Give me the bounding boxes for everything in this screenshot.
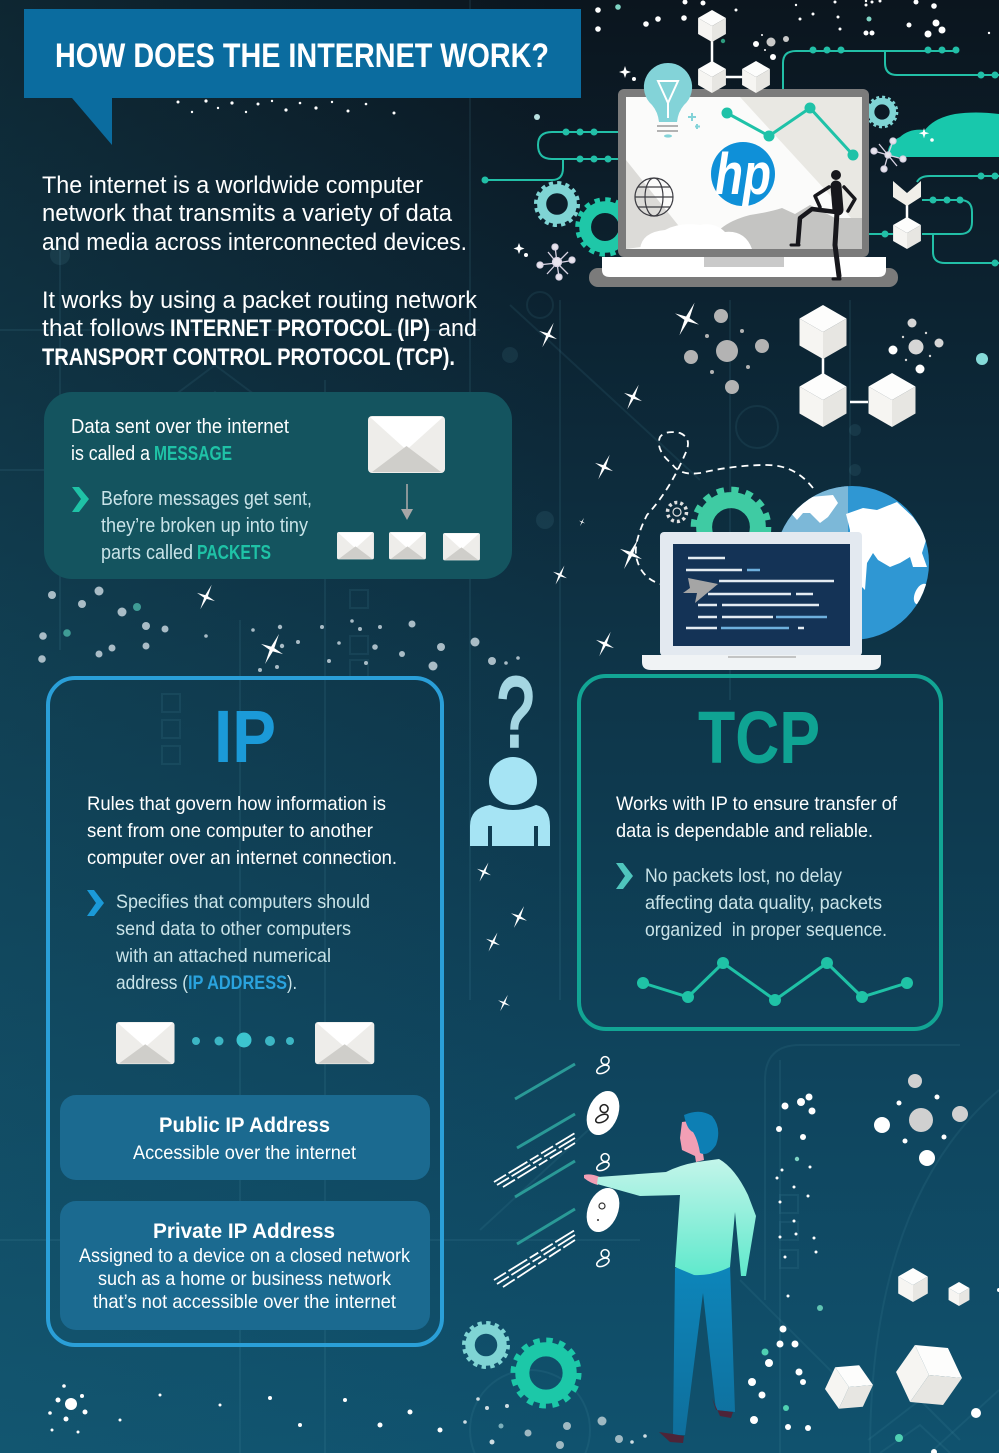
dashed path bbox=[636, 432, 813, 584]
scattered dots top right bbox=[534, 0, 990, 120]
decorative dots under banner bbox=[176, 99, 396, 114]
IP detail text: Specifies that computers should bbox=[116, 891, 370, 913]
intro text: and bbox=[438, 315, 477, 342]
laptop lid bbox=[589, 268, 898, 287]
cubes bbox=[698, 10, 921, 249]
top laptop illustration with circuits bbox=[482, 0, 999, 287]
TCP detail text: organized in proper sequence. bbox=[645, 919, 887, 941]
panel: TCP bbox=[579, 676, 941, 1029]
HP logo: hp bbox=[715, 142, 771, 207]
hand bbox=[584, 1174, 600, 1185]
heading: TCP: TCP bbox=[698, 696, 820, 779]
panel: message and packets bbox=[44, 392, 512, 579]
spark nodes bbox=[537, 138, 906, 280]
intro text: INTERNET PROTOCOL (IP) bbox=[170, 315, 430, 342]
shirt bbox=[597, 1159, 756, 1276]
icon: businessman bbox=[791, 170, 855, 279]
box: public IP address bbox=[60, 1095, 430, 1180]
cubes bottom right bbox=[820, 1268, 971, 1418]
screen artwork bbox=[626, 97, 862, 249]
box: public IP address: Accessible over the internet bbox=[133, 1142, 357, 1164]
icon: person with question mark bbox=[470, 657, 550, 846]
panel: message and packets: PACKETS bbox=[197, 542, 271, 564]
head bbox=[680, 1120, 704, 1162]
TCP detail text: affecting data quality, packets bbox=[645, 892, 882, 914]
box: private IP address: Private IP Address bbox=[153, 1220, 335, 1243]
circuit lines bbox=[482, 46, 999, 266]
second laptop illustration with globe bbox=[613, 432, 931, 670]
cloud bbox=[888, 112, 999, 157]
IP description: computer over an internet connection. bbox=[87, 847, 397, 869]
panel: message and packets: Before messages get sent, bbox=[101, 488, 312, 510]
icon: paper plane bbox=[683, 578, 718, 603]
IP detail text: with an attached numerical bbox=[115, 945, 331, 967]
IP description bbox=[87, 793, 397, 869]
panel: message and packets: parts called bbox=[101, 542, 193, 564]
box: public IP address: Public IP Address bbox=[159, 1114, 330, 1137]
TCP detail text: No packets lost, no delay bbox=[645, 865, 842, 887]
box: private IP address: Assigned to a device on a closed network bbox=[79, 1245, 410, 1267]
box: private IP address: that’s not accessible over the internet bbox=[93, 1291, 397, 1313]
IP detail text: address ( bbox=[116, 972, 188, 994]
globe bbox=[775, 480, 931, 640]
title banner bbox=[24, 9, 581, 145]
panel: message and packets: is called a bbox=[71, 443, 151, 465]
intro text bbox=[42, 172, 478, 371]
panel: IP bbox=[48, 678, 442, 1345]
IP detail text bbox=[115, 891, 370, 994]
laptop body bbox=[660, 532, 862, 656]
sparkle stars bbox=[514, 66, 636, 257]
gears bbox=[536, 183, 578, 225]
bullet chevron bbox=[616, 863, 633, 889]
icon: person with question mark: ? bbox=[497, 657, 534, 767]
intro text: that follows bbox=[42, 315, 165, 342]
icon: green gear bbox=[694, 490, 768, 564]
title banner: HOW DOES THE INTERNET WORK? bbox=[55, 37, 549, 75]
IP description: Rules that govern how information is bbox=[87, 793, 386, 815]
panel: message and packets: Data sent over the internet bbox=[71, 416, 289, 438]
IP detail text: IP ADDRESS bbox=[188, 972, 287, 994]
intro text: It works by using a packet routing network bbox=[42, 287, 478, 314]
intro text: network that transmits a variety of data bbox=[42, 200, 453, 227]
box: private IP address: such as a home or business network bbox=[98, 1268, 391, 1290]
bullet chevron bbox=[87, 890, 104, 916]
IP detail text: ). bbox=[287, 972, 297, 994]
code lines bbox=[686, 558, 834, 628]
star over dashes bbox=[613, 534, 649, 574]
gears bottom bbox=[464, 1323, 579, 1406]
icon: light bulb bbox=[644, 63, 700, 138]
scattered stars bbox=[191, 297, 707, 1014]
figure: person touching interface bbox=[584, 1112, 756, 1443]
IP detail text: send data to other computers bbox=[116, 918, 351, 940]
scattered dots bottom bbox=[48, 1074, 999, 1453]
envelopes with packet dots bbox=[116, 1022, 374, 1064]
line chart bbox=[637, 957, 913, 1006]
icon: globe outline bbox=[635, 178, 673, 216]
TCP description bbox=[616, 793, 898, 842]
scattered dots middle left bbox=[38, 586, 520, 672]
icon: small gear outline bbox=[668, 502, 686, 522]
IP description: sent from one computer to another bbox=[87, 820, 373, 842]
panel: message and packets: MESSAGE bbox=[154, 443, 232, 465]
TCP description: data is dependable and reliable. bbox=[616, 820, 873, 842]
hair bbox=[684, 1112, 718, 1154]
heading: IP: IP bbox=[214, 695, 276, 778]
panel: message and packets: they’re broken up into tiny bbox=[101, 515, 308, 537]
trousers bbox=[673, 1264, 735, 1435]
shoes bbox=[659, 1398, 733, 1443]
TCP detail text bbox=[645, 865, 887, 941]
intro text: TRANSPORT CONTROL PROTOCOL (TCP). bbox=[42, 344, 455, 371]
TCP description: Works with IP to ensure transfer of bbox=[616, 793, 898, 815]
intro text: The internet is a worldwide computer bbox=[42, 172, 423, 199]
floating interface elements bbox=[494, 1057, 626, 1287]
middle right cubes and dot clusters bbox=[684, 305, 988, 427]
chart on screen bbox=[722, 102, 858, 160]
box: private IP address bbox=[60, 1201, 430, 1330]
intro text: and media across interconnected devices. bbox=[42, 229, 467, 256]
